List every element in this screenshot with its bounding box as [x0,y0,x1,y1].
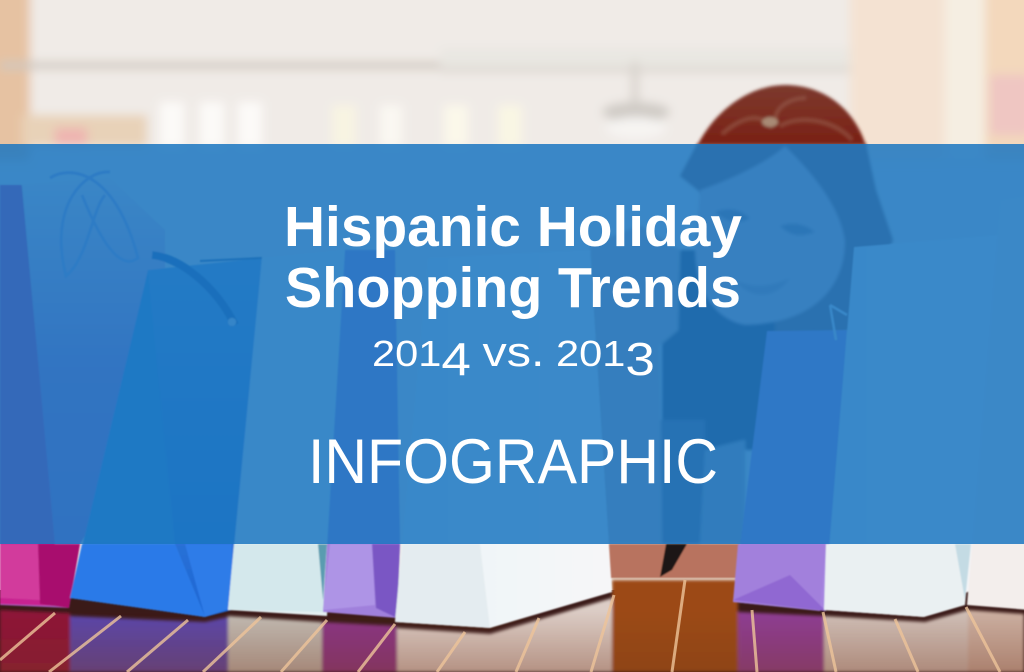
background: blurred store wall and shelves [0,0,1024,160]
magenta bag [0,178,165,608]
face [695,146,845,325]
purple bag [323,250,400,618]
shopping bags [0,172,1024,628]
counter reflection floor [0,580,1024,672]
blue bag handle [152,255,235,325]
hair, arm and neck behind the banner [590,144,893,544]
right white bag [824,235,999,617]
bag reflections [0,580,1024,672]
large white bag [395,250,612,628]
woman with red hair [590,85,893,578]
hair crown [697,85,866,146]
subtitle: years compared: vs. 201 [483,328,615,375]
title: Shopping Trends [285,256,741,320]
subtitle: years compared: 201 [372,333,432,374]
diagonal floor lines [0,580,1000,672]
right purple bag handle [830,305,847,340]
subtitle: years compared: 3 [625,333,655,385]
light blue bag [228,250,345,616]
magenta bag handles [50,172,138,276]
label: infographic: INFOGRAPHIC [308,427,718,497]
arm resting at the counter [605,544,740,578]
right purple bag [733,330,847,611]
far right white bag [967,195,1024,610]
blue bag [70,258,262,617]
title [284,195,742,320]
blue banner [0,144,1024,544]
subtitle: years compared: 4 [441,333,471,385]
title: Hispanic Holiday [284,195,742,259]
